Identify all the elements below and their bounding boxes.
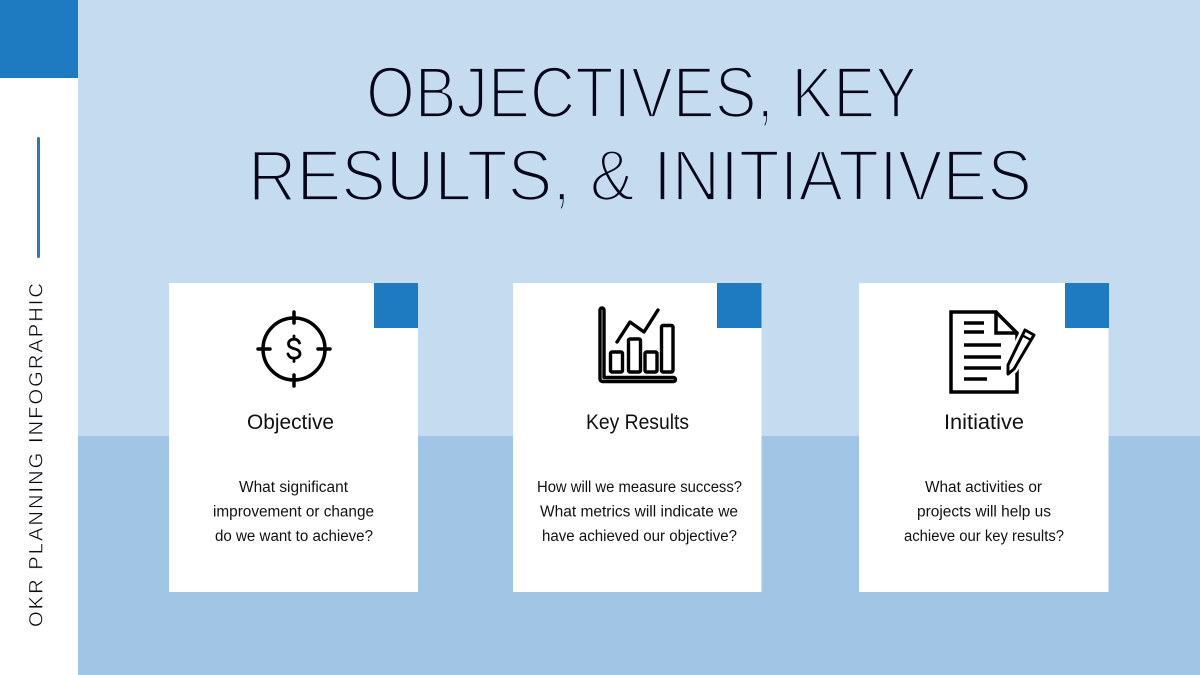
panel: objective xyxy=(169,283,418,592)
heading: initiative: Initiative xyxy=(944,411,1024,434)
icon: target with dollar xyxy=(258,312,330,386)
sidebar xyxy=(0,0,78,675)
heading: key results: Key Results xyxy=(586,411,689,434)
title xyxy=(248,54,1032,216)
text: objective description: do we want to achieve? xyxy=(215,528,373,545)
title: RESULTS, & INITIATIVES xyxy=(248,136,1032,216)
text: initiative description: achieve our key results? xyxy=(904,528,1064,545)
corner square: objective xyxy=(374,283,418,328)
text: initiative description xyxy=(904,479,1064,545)
text: initiative description: projects will help us xyxy=(917,504,1051,520)
panel: initiative xyxy=(859,283,1109,592)
background upper panel xyxy=(78,0,1200,436)
background lower panel xyxy=(78,436,1200,675)
text: objective description: What significant xyxy=(239,479,349,496)
text: initiative description: What activities or xyxy=(925,479,1042,496)
text: key results description: have achieved our objective? xyxy=(542,528,737,545)
text: key results description: How will we measure success? xyxy=(537,479,742,496)
text: key results description: What metrics will indicate we xyxy=(540,504,738,520)
text: key results description xyxy=(537,479,742,545)
title: OBJECTIVES, KEY xyxy=(366,54,917,134)
text: objective description: improvement or change xyxy=(213,504,374,520)
corner square: key results xyxy=(717,283,762,328)
text: objective description xyxy=(213,479,374,545)
heading: objective: Objective xyxy=(247,411,334,434)
sidebar vertical line xyxy=(37,137,40,258)
panel: key results xyxy=(513,283,762,592)
icon: bar chart with trend line xyxy=(600,308,676,382)
corner square: initiative xyxy=(1065,283,1109,328)
sidebar corner square xyxy=(0,0,78,78)
sidebar label: OKR PLANNING INFOGRAPHIC xyxy=(26,281,48,627)
icon: document with pencil xyxy=(951,312,1034,392)
